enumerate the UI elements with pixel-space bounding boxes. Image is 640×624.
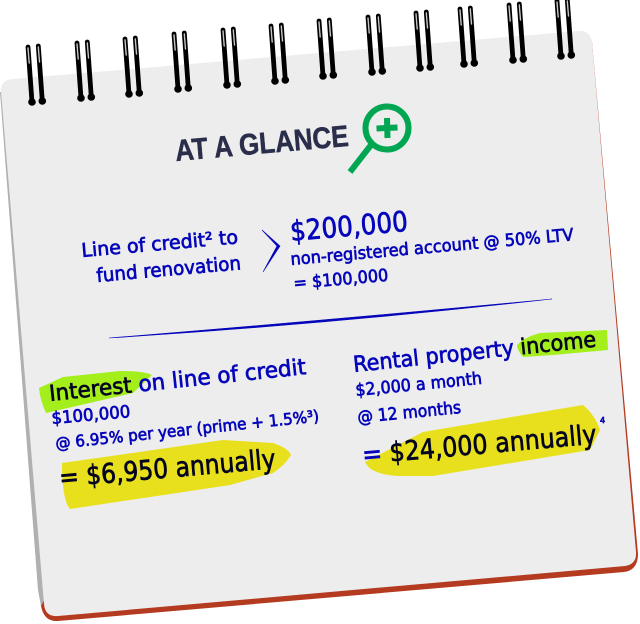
spiral binding rings [28, 0, 575, 106]
green highlight: interest [39, 371, 152, 413]
icon: chevron arrow [262, 230, 280, 272]
left column: interest on line of credit [48, 355, 320, 494]
text: line of credit to fund renovation [81, 226, 242, 287]
divider line [109, 299, 552, 338]
text: 24,000 annually: = $24,000 annually [361, 420, 598, 471]
green highlight: income [517, 330, 608, 357]
text: 2,000 a month: $2,000 a month [355, 369, 483, 401]
yellow highlight: 24,000 annually [365, 405, 600, 476]
text: 6,950 annually: = $6,950 annually [58, 444, 277, 494]
text: rate: @ 6.95% per year (prime + 1.5%³) [54, 406, 320, 453]
footnote marker 4: 4 [600, 416, 605, 425]
title: AT A GLANCE [174, 120, 350, 168]
yellow highlight: 6,950 annually [62, 440, 291, 509]
right column: rental property income [352, 328, 605, 471]
text: line of credit to fund renovation: fund renovation [96, 252, 242, 287]
text: 100,000: $100,000 [51, 402, 131, 429]
text: line of credit to fund renovation: Line of credit² to [81, 226, 239, 262]
icon: magnifying glass with plus [350, 106, 408, 172]
text: non-registered account: non-registered account @ 50% LTV [290, 225, 575, 270]
text: equals 100,000: = $100,000 [293, 266, 389, 294]
text: 12 months: @ 12 months [357, 398, 462, 428]
left page shadow [0, 92, 44, 606]
heading: interest on line of credit: Interest on line of credit [48, 355, 308, 407]
text: 200,000 amount: $200,000 [289, 205, 409, 248]
heading: rental property income: Rental property income [352, 328, 597, 378]
